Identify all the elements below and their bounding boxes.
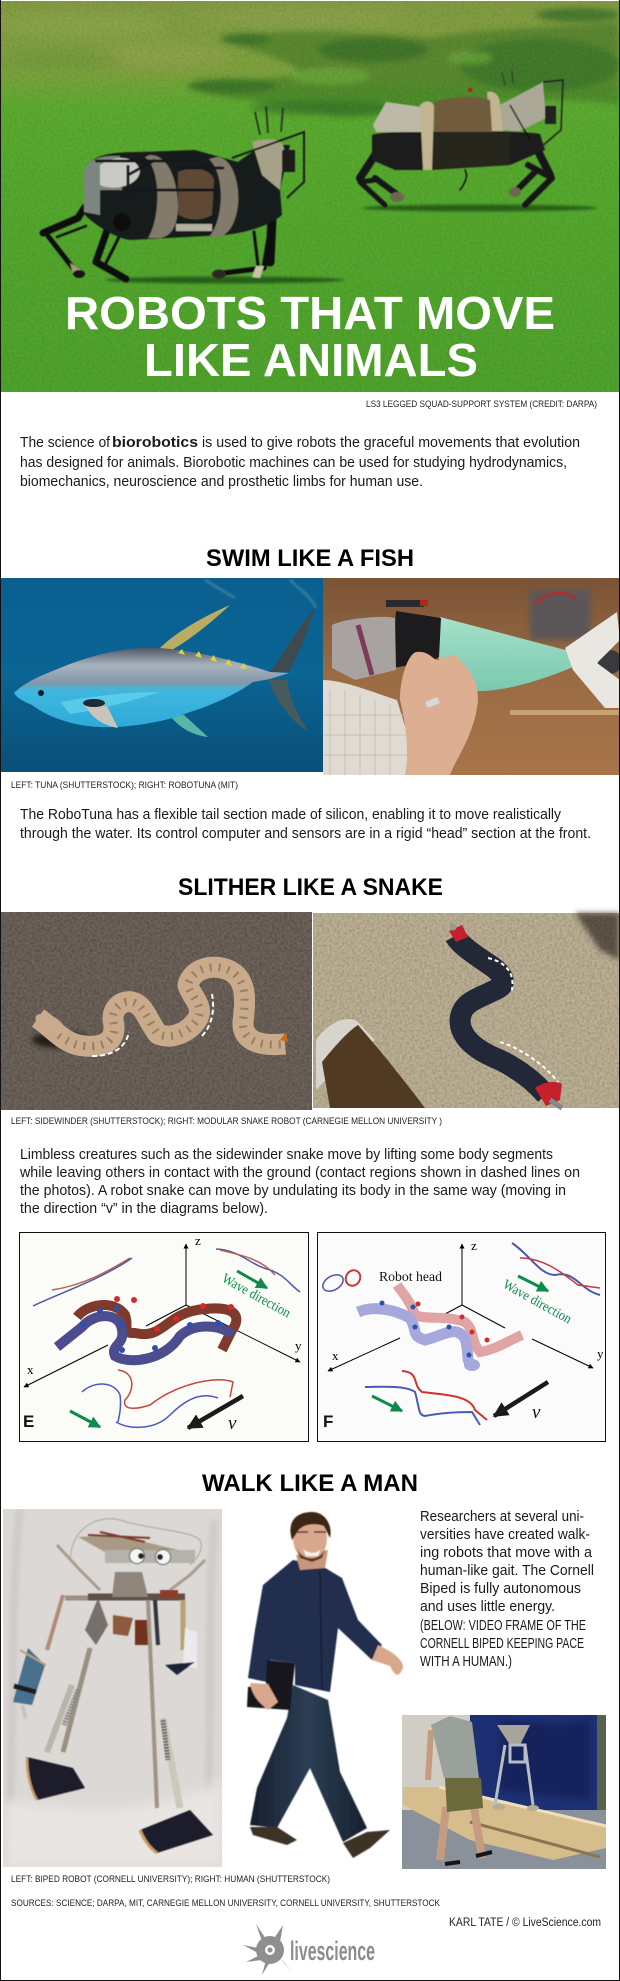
robotuna text: through the water. Its control computer and sensors are in a rigid “head” section at the front.: [20, 825, 591, 842]
diagram F: F: [323, 1412, 333, 1431]
walking text: versities have created walk-: [420, 1526, 590, 1543]
diagram F: v: [532, 1402, 541, 1423]
diagram E: Wave direction: [219, 1271, 293, 1321]
walking text: human-like gait. The Cornell: [420, 1562, 594, 1579]
walking text: Researchers at several uni-: [420, 1508, 584, 1525]
title: LIKE ANIMALS: [144, 334, 478, 386]
hero photo: LS3 robots on grass: [0, 1, 620, 392]
robotuna text: The RoboTuna has a flexible tail section made of silicon, enabling it to move realistically: [20, 806, 561, 823]
intro text: The science of: [20, 434, 111, 451]
sidewinder text: the photos). A robot snake can move by undulating its body in the same way (moving in: [20, 1182, 566, 1199]
diagram E: y: [295, 1338, 302, 1353]
fish caption: LEFT: TUNA (SHUTTERSTOCK); RIGHT: ROBOTUNA (MIT): [11, 780, 238, 791]
photo: sidewinder: [1, 912, 312, 1110]
photo: tuna: [1, 578, 323, 772]
intro text: biomechanics, neuroscience and prosthetic limbs for human use.: [20, 473, 423, 490]
diagram F: [318, 1232, 606, 1442]
diagram F: y: [597, 1346, 604, 1361]
biped caption: LEFT: BIPED ROBOT (CORNELL UNIVERSITY); RIGHT: HUMAN (SHUTTERSTOCK): [11, 1874, 330, 1885]
title: [65, 287, 555, 386]
heading: walk like a man: WALK LIKE A MAN: [202, 1470, 418, 1497]
diagram F: z: [471, 1238, 477, 1253]
sidewinder text: [19, 1146, 580, 1217]
diagram E: v: [228, 1413, 237, 1434]
diagram F: x: [332, 1348, 339, 1363]
title: ROBOTS THAT MOVE: [65, 287, 555, 339]
photo: cornell biped video frame: [402, 1715, 606, 1869]
diagram F: Robot head: [379, 1270, 442, 1285]
sidewinder text: the direction “v” in the diagrams below).: [20, 1200, 268, 1217]
walking text: ing robots that move with a: [420, 1544, 593, 1561]
right robot: [360, 70, 598, 212]
walking text: Biped is fully autonomous: [420, 1580, 581, 1597]
sources: SOURCES: SCIENCE; DARPA, MIT, CARNEGIE MELLON UNIVERSITY, CORNELL UNIVERSITY, SHUTTERSTOCK: [11, 1898, 441, 1909]
intro text: [20, 434, 580, 490]
diagram F: Wave direction: [500, 1277, 574, 1327]
diagram E: z: [195, 1233, 201, 1248]
diagram E: x: [27, 1362, 34, 1377]
diagram E: E: [23, 1412, 34, 1431]
sidewinder text: Limbless creatures such as the sidewinder snake move by lifting some body segments: [20, 1146, 553, 1163]
photo: robotuna: [323, 578, 620, 775]
walking text: [420, 1508, 594, 1670]
snake caption: LEFT: SIDEWINDER (SHUTTERSTOCK); RIGHT: MODULAR SNAKE ROBOT (CARNEGIE MELLON UNIVERSITY ): [11, 1116, 442, 1127]
walking text: WITH A HUMAN.): [420, 1653, 512, 1670]
livescience logo: livescience: [290, 1936, 375, 1966]
intro text: biorobotics: [112, 434, 198, 451]
sidewinder text: while leaving others in contact with the ground (contact regions shown in dashed lines on: [19, 1164, 580, 1181]
heading: slither like a snake: SLITHER LIKE A SNAKE: [178, 874, 443, 901]
credit: KARL TATE / © LiveScience.com: [449, 1917, 601, 1929]
intro text: has designed for animals. Biorobotic machines can be used for studying hydrodynamics,: [20, 454, 567, 471]
photo: modular snake robot: [313, 913, 619, 1108]
walking text: and uses little energy.: [420, 1598, 555, 1615]
livescience logo: [243, 1924, 375, 1975]
diagram E: [20, 1232, 308, 1442]
heading: swim like a fish: SWIM LIKE A FISH: [206, 545, 414, 572]
photo: biped robot: [3, 1509, 222, 1867]
left robot: [43, 106, 345, 284]
robotuna text: [20, 806, 591, 842]
photo: walking man: [247, 1512, 403, 1858]
intro text: is used to give robots the graceful movements that evolution: [202, 434, 580, 451]
